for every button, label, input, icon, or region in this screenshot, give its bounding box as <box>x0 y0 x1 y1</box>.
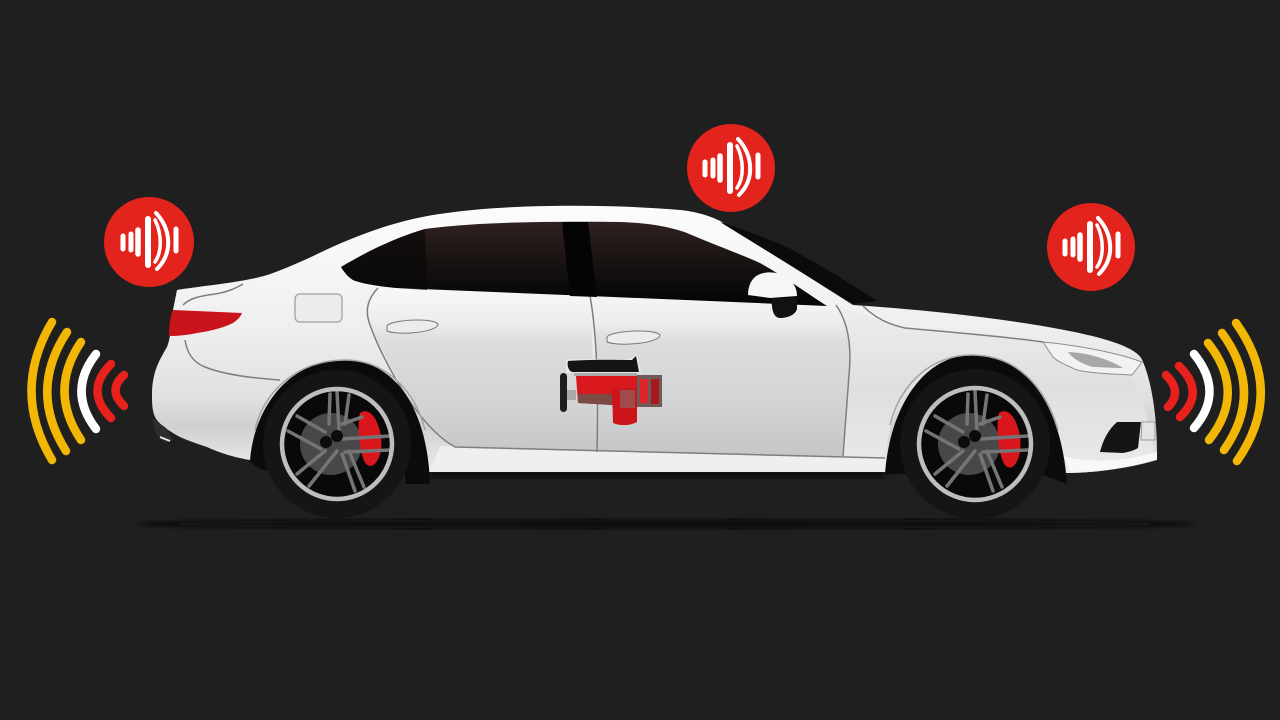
sensor waves: right <box>1166 323 1261 461</box>
side windows <box>341 222 827 306</box>
arch edge highlights <box>255 355 1058 430</box>
front wheel arch <box>885 355 1067 484</box>
tail light <box>169 310 242 336</box>
license plate holder <box>1141 422 1155 440</box>
ground shadow <box>135 519 1195 529</box>
fog lamp <box>1100 422 1141 453</box>
under-car shadow <box>430 471 886 478</box>
headlight <box>1043 342 1142 375</box>
engine component <box>560 354 662 425</box>
windshield <box>720 222 877 304</box>
rear wheel <box>263 370 411 518</box>
front door panel <box>590 296 850 456</box>
sill <box>430 446 885 472</box>
front wheel <box>900 369 1050 519</box>
icon: sound badge top <box>687 124 775 212</box>
rear door panel <box>367 288 597 452</box>
icon: sound badge left <box>104 197 194 287</box>
icon: sound badge right <box>1047 203 1135 291</box>
rear wheel arch <box>250 360 430 484</box>
panel lines <box>183 284 1043 458</box>
brake caliper <box>998 411 1020 468</box>
car <box>152 206 1157 519</box>
door handle front <box>607 331 660 344</box>
fuel door <box>295 294 342 322</box>
door handle rear <box>387 320 438 333</box>
brake caliper <box>359 411 381 466</box>
mirror <box>748 272 797 318</box>
front bumper highlight <box>1064 452 1157 472</box>
fender panel <box>835 305 1155 473</box>
car body <box>152 206 1157 473</box>
sensor waves: left <box>32 322 124 460</box>
exhaust <box>152 418 173 443</box>
